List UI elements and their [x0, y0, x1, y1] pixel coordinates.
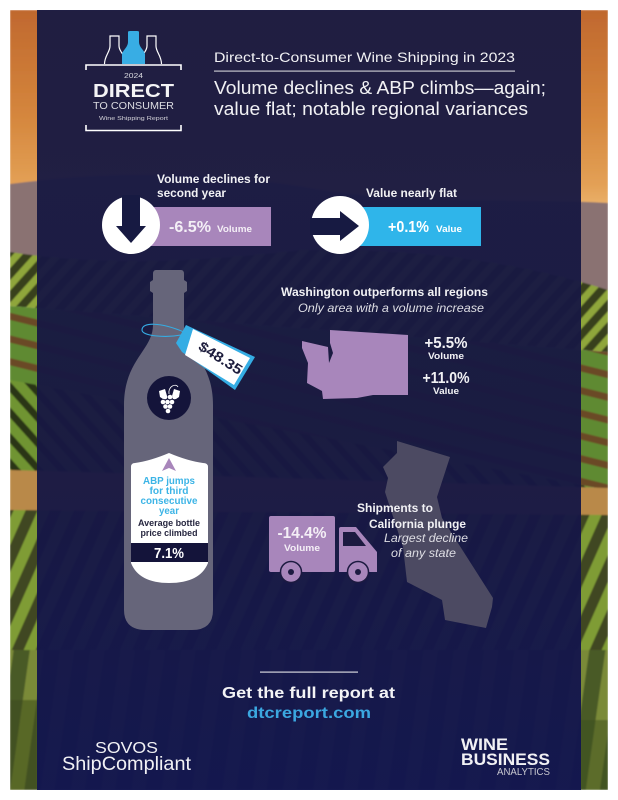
bottle silhouette [124, 270, 213, 630]
icon: right arrow [310, 196, 369, 254]
stat bar [340, 207, 481, 246]
logo tagline: Wine Shipping Report [99, 116, 169, 122]
logo: Sovos ShipCompliant [62, 740, 192, 775]
region subheading: Only area with a volume increase [298, 301, 484, 315]
call to action [222, 672, 396, 722]
logo: Sovos ShipCompliant: ShipCompliant [62, 754, 192, 775]
logo: Wine Business Analytics [461, 736, 550, 778]
stat unit: Volume [217, 224, 252, 235]
title block [214, 50, 546, 119]
logo year: 2024 [124, 71, 143, 80]
stat: volume [102, 172, 271, 254]
divider [260, 672, 358, 673]
stat heading: Value nearly flat [366, 186, 457, 200]
report link: dtcreport.com [247, 705, 371, 722]
volume stat [424, 335, 468, 362]
bottle: average bottle price [124, 270, 255, 630]
main heading line two: value flat; notable regional variances [214, 99, 528, 119]
label caption [138, 518, 200, 538]
value stat [422, 370, 470, 397]
eyebrow heading: Direct-to-Consumer Wine Shipping in 2023 [214, 50, 515, 65]
logo: 2024 Direct to Consumer [86, 31, 181, 130]
region heading [357, 501, 466, 531]
stat value: -6.5% [169, 219, 211, 236]
stat heading [157, 172, 270, 200]
heading rule [214, 70, 515, 72]
vineyard upper rows [10, 250, 608, 352]
stat heading: second year [157, 186, 226, 200]
logo: Wine Business Analytics: WINE [461, 736, 508, 754]
region heading: Shipments to [357, 501, 433, 515]
icon: delivery truck [269, 516, 377, 582]
value stat: Value [433, 386, 459, 397]
label band [131, 543, 208, 562]
logo wordmark: DIRECT [93, 81, 174, 101]
stat bar [131, 207, 271, 246]
price tag: $48.35 [196, 338, 246, 378]
logo frame [86, 65, 181, 130]
vineyard middle rows [10, 306, 608, 490]
map: California [383, 441, 493, 628]
icon: three wine bottles [104, 31, 162, 64]
map: Washington [302, 330, 408, 399]
logo subtitle: TO CONSUMER [93, 100, 174, 112]
label value: 7.1% [154, 546, 184, 562]
label caption: Average bottle [138, 518, 200, 528]
bottle label [131, 453, 208, 583]
label heading: ABP jumps [143, 475, 195, 487]
label heading: year [159, 505, 179, 517]
logo: Wine Business Analytics: ANALYTICS [497, 767, 550, 778]
icon: up arrow [162, 458, 176, 471]
label heading: consecutive [140, 495, 198, 507]
stat value: +0.1% [388, 219, 429, 236]
region subheading [384, 531, 468, 560]
logo: Wine Business Analytics: BUSINESS [461, 751, 550, 769]
call to action text: Get the full report at [222, 685, 396, 702]
icon: grapes [147, 376, 191, 420]
volume stat: +5.5% [424, 335, 468, 352]
logo: Sovos ShipCompliant: SOVOS [95, 740, 158, 757]
vineyard angled rows [10, 380, 608, 490]
sky [10, 10, 608, 215]
price tag [176, 325, 255, 390]
volume stat: Volume [428, 351, 464, 362]
region: California [269, 441, 493, 628]
stat unit: Value [436, 224, 462, 235]
region: Washington [281, 285, 488, 399]
region subheading: of any state [391, 546, 456, 560]
stat heading: Volume declines for [157, 172, 270, 186]
dark tree shading [10, 700, 37, 790]
price tag string [142, 324, 184, 336]
truck unit: Volume [284, 543, 320, 554]
region heading: California plunge [369, 517, 466, 531]
label heading: for third [150, 485, 188, 497]
truck value: -14.4% [278, 525, 327, 542]
vineyard lower rows [10, 510, 608, 650]
region heading: Washington outperforms all regions [281, 285, 488, 299]
main heading: Volume declines & ABP climbs—again; [214, 78, 546, 98]
icon: down arrow [102, 195, 160, 254]
stat: value [310, 186, 481, 254]
region subheading: Largest decline [384, 531, 468, 545]
label heading [140, 475, 198, 517]
label caption: price climbed [140, 528, 198, 538]
distant hills [10, 175, 608, 300]
dirt strip [10, 470, 608, 518]
vineyard foreground rows [10, 650, 608, 790]
value stat: +11.0% [422, 370, 470, 387]
